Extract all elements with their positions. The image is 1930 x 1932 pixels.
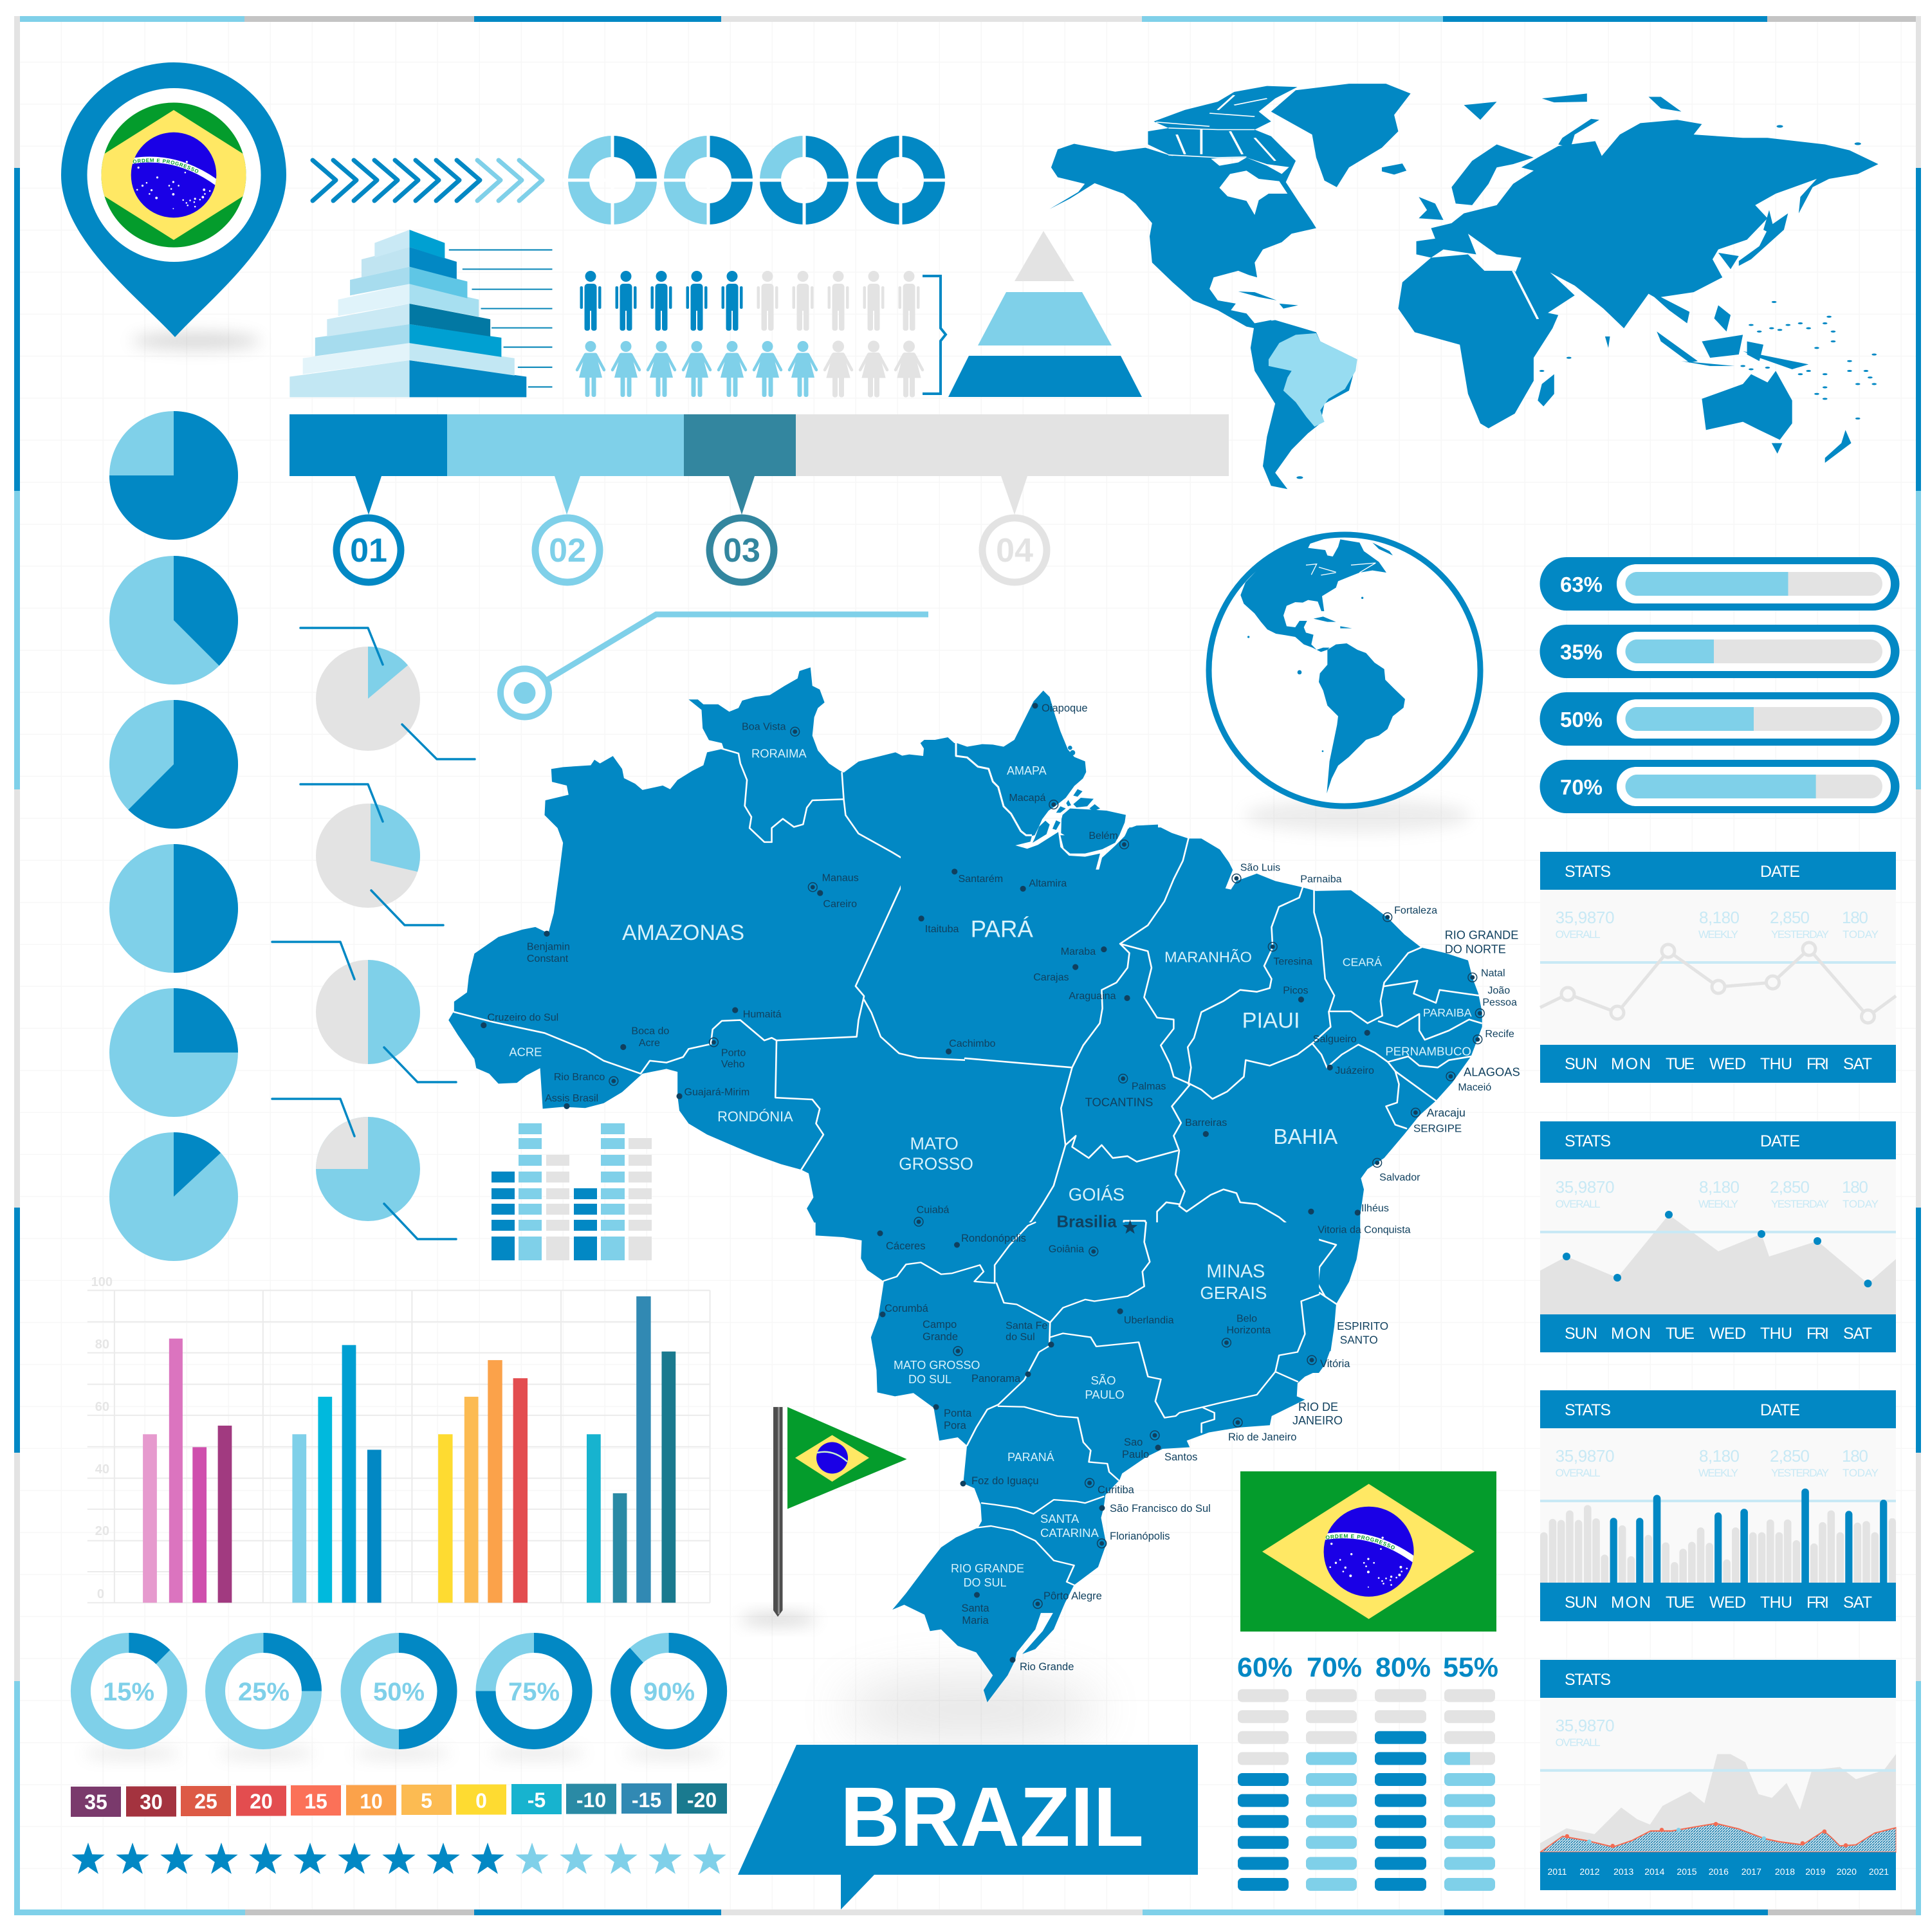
map labels: south: SÃO xyxy=(1090,1374,1116,1387)
callout 04: 04 xyxy=(996,532,1033,569)
map labels: north and west: MATO xyxy=(910,1134,959,1154)
map labels: south: JANEIRO xyxy=(1292,1414,1343,1427)
map labels: north-east and centre: MARANHÃO xyxy=(1164,949,1252,966)
map labels: south: Panorama xyxy=(971,1373,1021,1385)
map labels: north-east and centre: Altamira xyxy=(1029,878,1067,889)
location ring with leader line xyxy=(501,614,928,717)
map labels: north-east and centre: DO NORTE xyxy=(1445,943,1506,955)
column bar chart: 0 xyxy=(97,1587,104,1601)
stats panel: line chart: OVERALL xyxy=(1556,928,1601,941)
callout 02 xyxy=(535,518,600,582)
map labels: south: Sao xyxy=(1124,1437,1143,1448)
stats panel: area chart: YESTERDAY xyxy=(1771,1198,1829,1210)
map labels: north and west: Cuiabá xyxy=(917,1204,950,1215)
map labels: north-east and centre: Goiânia xyxy=(1049,1243,1084,1255)
temperature scale: 35 xyxy=(84,1790,107,1814)
stats panel: bar chart: 8,180 xyxy=(1699,1446,1740,1466)
stats panel: bar chart: WED xyxy=(1709,1594,1746,1612)
stats panel: line chart: SAT xyxy=(1843,1055,1872,1073)
stats panel: bar chart: WEEKLY xyxy=(1698,1467,1738,1479)
stats panel: yearly area chart: 2013 xyxy=(1613,1866,1633,1877)
temperature scale: 25 xyxy=(194,1790,217,1813)
equalizer bars xyxy=(492,1123,652,1260)
pill 63% xyxy=(1540,557,1899,611)
people pictogram: men xyxy=(580,271,920,331)
map labels: south: Florianópolis xyxy=(1110,1531,1170,1542)
map labels: north-east and centre: Natal xyxy=(1481,967,1505,979)
map labels: south: SANTA xyxy=(1040,1512,1080,1525)
map labels: north-east and centre: ESPIRITO xyxy=(1337,1320,1388,1332)
map labels: north-east and centre: Barreiras xyxy=(1185,1117,1227,1128)
stats panel: line chart: TODAY xyxy=(1843,928,1879,941)
map labels: south: Paulo xyxy=(1122,1449,1149,1460)
stats panel: yearly area chart: 2019 xyxy=(1805,1866,1826,1877)
temperature scale: -10 xyxy=(576,1789,606,1812)
map labels: north-east and centre: PERNAMBUCO xyxy=(1385,1044,1471,1058)
people pictogram: women xyxy=(577,341,923,397)
map labels: north and west: Benjamin xyxy=(527,941,570,953)
map labels: north-east and centre: BAHIA xyxy=(1273,1125,1338,1149)
percentage donut row: 15% xyxy=(103,1678,154,1706)
stats panel: area chart: 8,180 xyxy=(1699,1177,1740,1197)
stats panel: bar chart: TODAY xyxy=(1843,1467,1879,1479)
map labels: north-east and centre: Fortaleza xyxy=(1394,905,1437,916)
stats panel: area chart: STATS xyxy=(1565,1132,1611,1150)
map labels: south: RIO GRANDE xyxy=(951,1562,1024,1575)
map pin with Brazil flag xyxy=(61,62,286,355)
temperature scale: -15 xyxy=(632,1789,661,1812)
map labels: south: MATO GROSSO xyxy=(894,1359,980,1372)
stats panel: line chart: 180 xyxy=(1842,908,1868,927)
stats panel: bar chart: DATE xyxy=(1760,1401,1800,1419)
callout 01: 01 xyxy=(350,532,387,569)
map labels: north and west: AMAZONAS xyxy=(622,921,744,945)
map labels: north-east and centre: São Luis xyxy=(1240,861,1280,873)
map labels: south: Rondonópolis xyxy=(961,1233,1026,1244)
segmented bar with numbered callouts xyxy=(290,414,1229,582)
map labels: north-east and centre: GOIÁS xyxy=(1069,1184,1125,1204)
arrow chevrons xyxy=(313,160,542,201)
pill 63%: 63% xyxy=(1560,573,1603,596)
percentage donut row: 75% xyxy=(508,1678,560,1706)
stats panel: yearly area chart: 2021 xyxy=(1869,1866,1889,1877)
stats panel: bar chart: SUN xyxy=(1565,1594,1597,1612)
stats panel: bar chart: 2,850 xyxy=(1770,1446,1810,1466)
stats panel: yearly area chart: 2016 xyxy=(1709,1866,1729,1877)
southern states shape xyxy=(816,1222,1319,1702)
map labels: north and west: Guajará-Mirim xyxy=(684,1087,749,1098)
stats panel: bar chart: TUE xyxy=(1666,1594,1695,1612)
temperature scale xyxy=(71,1783,727,1817)
map labels: north-east and centre: Teresina xyxy=(1273,956,1312,968)
map labels: south: PARANÁ xyxy=(1007,1451,1054,1464)
map labels: north-east and centre: GERAIS xyxy=(1200,1283,1267,1303)
stats panel: line chart: WED xyxy=(1709,1055,1746,1073)
percentage donut row: 25% xyxy=(238,1678,290,1706)
stats panel: bar chart: MON xyxy=(1611,1594,1651,1612)
stats panel: line chart: MON xyxy=(1611,1055,1651,1073)
map labels: north-east and centre: Parnaiba xyxy=(1300,874,1342,885)
map labels: north and west: RORAIMA xyxy=(751,746,807,760)
map labels: north and west: Porto xyxy=(721,1047,746,1058)
stats panel: line chart: WEEKLY xyxy=(1698,928,1738,941)
stats panel: line chart: THU xyxy=(1760,1055,1792,1073)
pennant flag on pole xyxy=(740,1407,907,1625)
map labels: north-east and centre: Belo xyxy=(1236,1312,1257,1324)
stats panel: yearly area chart xyxy=(1540,1660,1896,1890)
stats panel: line chart: YESTERDAY xyxy=(1771,928,1829,941)
stats panel: yearly area chart: 2011 xyxy=(1547,1866,1567,1877)
temperature scale: 20 xyxy=(250,1790,273,1813)
Brazil flag rectangle xyxy=(1240,1471,1496,1632)
stats panel: bar chart: THU xyxy=(1760,1594,1792,1612)
map labels: north-east and centre: SERGIPE xyxy=(1413,1123,1462,1135)
percent level columns: 70% xyxy=(1307,1652,1362,1683)
map labels: north-east and centre: PARAIBA xyxy=(1423,1006,1472,1019)
map labels: north and west: Constant xyxy=(527,953,569,964)
map labels: north and west: Cachimbo xyxy=(949,1038,996,1049)
map labels: south: Grande xyxy=(923,1331,958,1343)
western states shape xyxy=(448,667,1016,1222)
map labels: north and west: Boca do xyxy=(631,1025,669,1036)
map labels: south: Rio de Janeiro xyxy=(1228,1431,1296,1443)
callout 02: 02 xyxy=(549,532,586,569)
map labels: south: Santos xyxy=(1164,1451,1197,1463)
callout 04 xyxy=(982,518,1047,582)
temperature scale: -5 xyxy=(528,1789,546,1812)
pill 70%: 70% xyxy=(1560,775,1603,799)
map labels: south: São Francisco do Sul xyxy=(1110,1503,1211,1514)
map labels: south: Campo xyxy=(923,1319,957,1330)
map labels: north-east and centre: TOCANTINS xyxy=(1085,1096,1153,1109)
column bar chart xyxy=(87,1275,710,1603)
map labels: south: Foz do Iguaçu xyxy=(971,1475,1039,1487)
map labels: south: DO SUL xyxy=(908,1373,951,1386)
map labels: south: Corumbá xyxy=(885,1303,929,1314)
stats panel: area chart: 35,9870 xyxy=(1556,1177,1615,1197)
map labels: north and west xyxy=(488,721,1003,1215)
map labels: north and west: Rio Branco xyxy=(554,1071,605,1083)
world map xyxy=(1049,84,1879,489)
temperature scale: 30 xyxy=(140,1790,163,1814)
map labels: south: CATARINA xyxy=(1040,1526,1099,1540)
percent level columns: 80% xyxy=(1375,1652,1431,1683)
map labels: north-east and centre: PARÁ xyxy=(971,916,1033,943)
map labels: south xyxy=(885,703,1350,1673)
stats panel: area chart: OVERALL xyxy=(1556,1198,1601,1210)
map labels: south: Santa xyxy=(961,1603,989,1614)
map labels: north-east and centre: Ilhéus xyxy=(1361,1202,1389,1214)
map labels: south: Maria xyxy=(962,1615,989,1626)
map labels: south: PAULO xyxy=(1085,1388,1125,1401)
map labels: south: Vitória xyxy=(1320,1358,1350,1370)
stats panel: area chart: SUN xyxy=(1565,1325,1597,1343)
map labels: north and west: Acre xyxy=(639,1037,660,1049)
map labels: north and west: ACRE xyxy=(509,1045,542,1058)
map labels: south: Ponta xyxy=(944,1408,972,1419)
map labels: north-east and centre: Uberlandia xyxy=(1124,1314,1174,1326)
percentage donut row: 50% xyxy=(373,1678,425,1706)
temperature scale: 5 xyxy=(421,1789,432,1812)
map labels: north-east and centre: Santa Fe xyxy=(1006,1320,1047,1332)
map labels: south: Oiapoque xyxy=(1042,703,1088,714)
map labels: north and west: Humaitá xyxy=(743,1009,782,1020)
map labels: north-east and centre: Maceió xyxy=(1458,1081,1491,1093)
map labels: north and west: Santarém xyxy=(958,873,1003,885)
map labels: north and west: Careiro xyxy=(823,898,857,910)
percent level columns: 60% xyxy=(1237,1652,1292,1683)
left column of pie charts xyxy=(109,411,238,1261)
stats panel: area chart: TODAY xyxy=(1843,1198,1879,1210)
map labels: north and west: Boa Vista xyxy=(742,721,786,732)
map labels: south: Cáceres xyxy=(886,1240,925,1252)
small grey pies with leader lines xyxy=(272,628,475,1239)
map labels: north-east and centre xyxy=(971,792,1520,1347)
BRAZIL banner: BRAZIL xyxy=(840,1769,1144,1864)
map labels: north-east and centre: Palmas xyxy=(1132,1081,1166,1092)
stats panel: line chart xyxy=(1540,852,1896,1083)
column bar chart: 20 xyxy=(95,1524,109,1538)
stats panel: line chart: TUE xyxy=(1666,1055,1695,1073)
map labels: north-east and centre: CEARÁ xyxy=(1343,955,1382,968)
map labels: north-east and centre: Picos xyxy=(1283,984,1309,996)
map labels: north-east and centre: João xyxy=(1487,984,1510,996)
map labels: north-east and centre: do Sul xyxy=(1006,1331,1035,1343)
star rating row xyxy=(71,1843,726,1874)
callout 03 xyxy=(710,518,774,582)
pill 35%: 35% xyxy=(1560,640,1603,664)
map labels: south: Rio Grande xyxy=(1020,1661,1074,1673)
map labels: north-east and centre: Pessoa xyxy=(1482,997,1517,1008)
percent level columns xyxy=(1237,1652,1498,1891)
stats panel: line chart: 2,850 xyxy=(1770,908,1810,927)
callout 01 xyxy=(336,518,401,582)
map labels: north-east and centre: SANTO xyxy=(1340,1334,1378,1347)
stats panel: area chart xyxy=(1540,1121,1896,1352)
stats panel: yearly area chart: 2014 xyxy=(1644,1866,1665,1877)
map labels: north-east and centre: Maraba xyxy=(1061,946,1096,957)
pill 35% xyxy=(1540,625,1899,678)
map labels: north-east and centre: Recife xyxy=(1485,1028,1514,1040)
map labels: north-east and centre: Vitoria da Conquista xyxy=(1318,1224,1411,1235)
map labels: north and west: RONDÓNIA xyxy=(717,1109,793,1125)
stats panel: yearly area chart: 35,9870 xyxy=(1556,1716,1615,1735)
stats panel: line chart: 35,9870 xyxy=(1556,908,1615,927)
map labels: north-east and centre: Araguaina xyxy=(1069,990,1116,1002)
map labels: south: Pôrto Alegre xyxy=(1043,1590,1102,1602)
map labels: north-east and centre: Brasilia xyxy=(1056,1213,1117,1231)
north-east states shape xyxy=(965,827,1482,1351)
map labels: north-east and centre: MINAS xyxy=(1206,1261,1265,1282)
stats panel: line chart: FRI xyxy=(1806,1055,1829,1073)
stats panel: yearly area chart: OVERALL xyxy=(1556,1736,1601,1749)
stats panel: line chart: STATS xyxy=(1565,863,1611,881)
temperature scale: -20 xyxy=(687,1789,717,1812)
stats panel: area chart: SAT xyxy=(1843,1325,1872,1343)
stats panel: yearly area chart: 2020 xyxy=(1837,1866,1857,1877)
temperature scale: 15 xyxy=(304,1790,327,1813)
map labels: north and west: Veho xyxy=(721,1058,745,1070)
map labels: north and west: Cruzeiro do Sul xyxy=(488,1012,558,1024)
stats panel: bar chart: STATS xyxy=(1565,1401,1611,1419)
pill 70% xyxy=(1540,760,1899,813)
stats panel: yearly area chart: 2012 xyxy=(1579,1866,1600,1877)
Amapa and river delta shape xyxy=(901,690,1158,926)
stats panel: bar chart: YESTERDAY xyxy=(1771,1467,1829,1479)
stats panel: area chart: THU xyxy=(1760,1325,1792,1343)
map labels: north and west: Assis Brasil xyxy=(545,1092,598,1104)
map labels: north-east and centre: Juázeiro xyxy=(1335,1065,1374,1076)
quartered donuts row xyxy=(563,132,949,228)
stats panel: bar chart: 180 xyxy=(1842,1446,1868,1466)
percentage donut row: 90% xyxy=(643,1678,695,1706)
stats panel: yearly area chart: STATS xyxy=(1565,1671,1611,1689)
map labels: north-east and centre: Belém xyxy=(1089,830,1118,842)
stats panel: area chart: FRI xyxy=(1806,1325,1829,1343)
map labels: north-east and centre: Carajas xyxy=(1033,971,1069,983)
stats panel: area chart: MON xyxy=(1611,1325,1651,1343)
Espirito Santo coast patch xyxy=(1309,1350,1330,1373)
bracket xyxy=(923,276,946,394)
map labels: south: Pora xyxy=(944,1420,967,1431)
column bar chart: 100 xyxy=(91,1275,113,1289)
callout 03: 03 xyxy=(723,532,760,569)
stats panel: bar chart: SAT xyxy=(1843,1594,1872,1612)
map labels: north-east and centre: ALAGOAS xyxy=(1464,1065,1520,1078)
stats panel: yearly area chart: 2017 xyxy=(1742,1866,1761,1877)
map labels: north-east and centre: Horizonta xyxy=(1226,1325,1271,1336)
map labels: north and west: GROSSO xyxy=(899,1154,973,1173)
column bar chart: 60 xyxy=(95,1400,109,1414)
map labels: south: DO SUL xyxy=(963,1576,1007,1589)
stats panel: yearly area chart: 2015 xyxy=(1677,1866,1697,1877)
stats panel: bar chart: FRI xyxy=(1806,1594,1829,1612)
stats panel: bar chart xyxy=(1540,1390,1896,1621)
map labels: north-east and centre: Salgueiro xyxy=(1313,1033,1357,1045)
map labels: south: RIO DE xyxy=(1298,1401,1338,1413)
stats panel: area chart: WEEKLY xyxy=(1698,1198,1738,1210)
progress pills xyxy=(1540,557,1899,813)
stats panel: line chart: DATE xyxy=(1760,863,1800,881)
globe xyxy=(1209,535,1480,833)
percentage donut row xyxy=(80,1643,721,1760)
stats panel: area chart: 2,850 xyxy=(1770,1177,1810,1197)
map labels: south: Curitiba xyxy=(1098,1484,1135,1496)
column bar chart: 80 xyxy=(95,1338,109,1352)
map labels: north-east and centre: Salvador xyxy=(1379,1172,1420,1183)
map labels: north-east and centre: PIAUI xyxy=(1242,1008,1300,1033)
pill 50% xyxy=(1540,692,1899,746)
pill 50%: 50% xyxy=(1560,708,1603,731)
city markers xyxy=(481,703,1484,1662)
BRAZIL banner xyxy=(738,1745,1198,1909)
map labels: north-east and centre: Macapá xyxy=(1009,792,1046,804)
map labels: north and west: Manaus xyxy=(822,872,859,884)
stats panel: bar chart: 35,9870 xyxy=(1556,1446,1615,1466)
map labels: north-east and centre: RIO GRANDE xyxy=(1445,928,1518,941)
column bar chart: 40 xyxy=(95,1462,109,1477)
percent level columns: 55% xyxy=(1443,1652,1498,1683)
stats panel: line chart: 8,180 xyxy=(1699,908,1740,927)
stats panel: yearly area chart: 2018 xyxy=(1775,1866,1795,1877)
map labels: north and west: Itaituba xyxy=(925,923,959,935)
stats panel: area chart: WED xyxy=(1709,1325,1746,1343)
Brazil map xyxy=(448,667,1520,1741)
Brazil flag rectangle: ORDEM E PROGRESSO xyxy=(1325,1534,1395,1549)
temperature scale: 10 xyxy=(360,1790,383,1813)
tiered triangle xyxy=(948,231,1142,397)
stepped 3D pyramid xyxy=(290,230,552,397)
stats panel: line chart: SUN xyxy=(1565,1055,1597,1073)
stats panel: area chart: 180 xyxy=(1842,1177,1868,1197)
stats panel: area chart: DATE xyxy=(1760,1132,1800,1150)
map labels: south: AMAPA xyxy=(1007,764,1047,777)
stats panel: area chart: TUE xyxy=(1666,1325,1695,1343)
map labels: north-east and centre: Aracaju xyxy=(1427,1107,1466,1119)
temperature scale: 0 xyxy=(475,1789,487,1812)
map pin with Brazil flag: ORDEM E PROGRESSO xyxy=(133,158,198,173)
stats panel: bar chart: OVERALL xyxy=(1556,1467,1601,1479)
